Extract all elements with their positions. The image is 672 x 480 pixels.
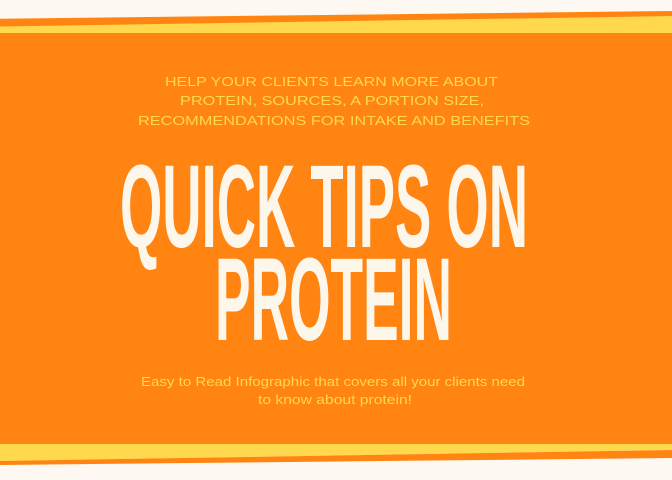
description: Easy to Read Infographic that covers all your clients need [141, 374, 525, 389]
subtitle: PROTEIN, SOURCES, A PORTION SIZE, [180, 93, 484, 108]
subtitle: RECOMMENDATIONS FOR INTAKE AND BENEFITS [138, 113, 530, 128]
subtitle: HELP YOUR CLIENTS LEARN MORE ABOUT [165, 74, 498, 89]
top stripes [0, 11, 672, 34]
subtitle [138, 74, 530, 128]
description [141, 374, 525, 407]
bottom stripes [0, 444, 672, 465]
description: to know about protein! [258, 392, 412, 407]
title [120, 141, 528, 366]
